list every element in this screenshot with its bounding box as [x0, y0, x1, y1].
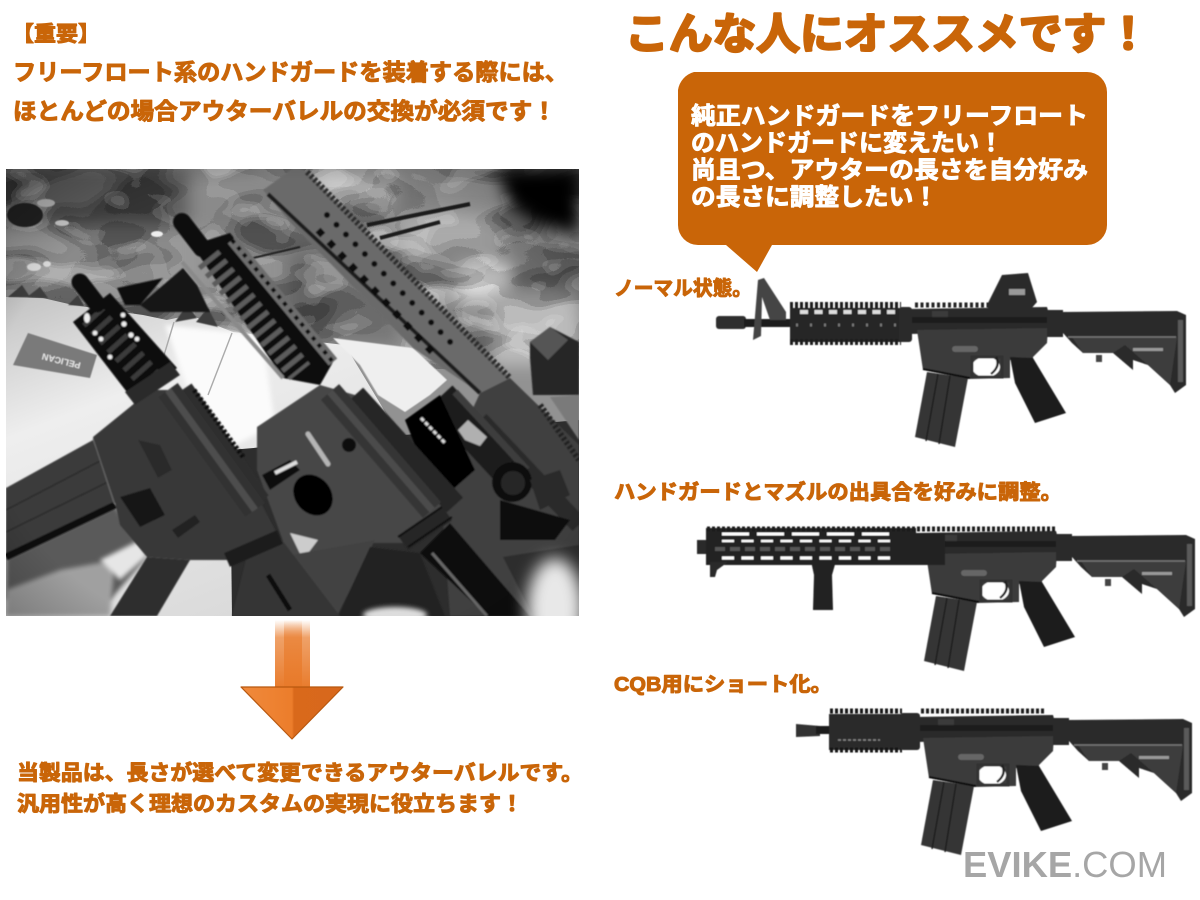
title: こんな人にオススメです！: [625, 11, 1150, 59]
callout speech bubble: のハンドガードに変えたい！: [691, 130, 1003, 157]
heading: important notice: ほとんどの場合アウターバレルの交換が必須です！: [13, 98, 556, 124]
rifle: free float handguard: [697, 528, 1195, 671]
label: normal state: ノーマル状態。: [614, 277, 752, 300]
camo luminance: [0, 165, 580, 365]
rifle 1 handguard: [73, 293, 177, 400]
label: CQB short: CQB用にショート化。: [614, 673, 832, 696]
label: adjust handguard and muzzle: ハンドガードとマズルの出具合を好みに調整。: [614, 480, 1062, 504]
photo: three rifles on a case over camo fabric: [6, 169, 579, 616]
callout speech bubble: 尚且つ、アウターの長さを自分好み: [691, 157, 1088, 184]
rifle 2 barrel past ring: [420, 523, 530, 616]
lower shadows: [6, 505, 147, 600]
white mount block: [333, 338, 447, 412]
callout speech bubble: の長さに調整したい！: [691, 184, 938, 211]
rifle 1 muzzle: [80, 282, 97, 304]
case logo label: PELICAN: [41, 351, 82, 371]
rifle 2 muzzle: [182, 222, 202, 248]
rifle 3 (back): [263, 167, 579, 616]
rifle 2 handguard: [192, 233, 333, 385]
rifle: normal configuration: [716, 273, 1186, 447]
product description: 当製品は、長さが選べて変更できるアウターバレルです。: [17, 761, 583, 785]
top right scope: [530, 327, 579, 395]
optic on rifle 2: [405, 392, 570, 540]
watermark: EVIKE.COM: EVIKE.COM: [963, 844, 1167, 885]
callout speech bubble: [678, 72, 1107, 272]
product description: 汎用性が高く理想のカスタムの実現に役立ちます！: [17, 792, 523, 816]
heading: important notice: フリーフロート系のハンドガードを装着する際には、: [13, 59, 568, 85]
case logo label: [13, 333, 97, 378]
callout speech bubble: 純正ハンドガードをフリーフロート: [691, 103, 1088, 130]
rifle: CQB short: [796, 711, 1192, 855]
folded front sight: [117, 278, 163, 305]
heading: important notice: 【重要】: [12, 23, 100, 46]
rifle 2 (middle): [182, 222, 530, 623]
product description: [17, 761, 583, 816]
rifle 1 (front): [6, 268, 340, 616]
heading: important notice: [12, 23, 568, 124]
white case: [6, 297, 387, 616]
arrow pointing down: [241, 620, 343, 739]
vignette: [6, 169, 579, 616]
